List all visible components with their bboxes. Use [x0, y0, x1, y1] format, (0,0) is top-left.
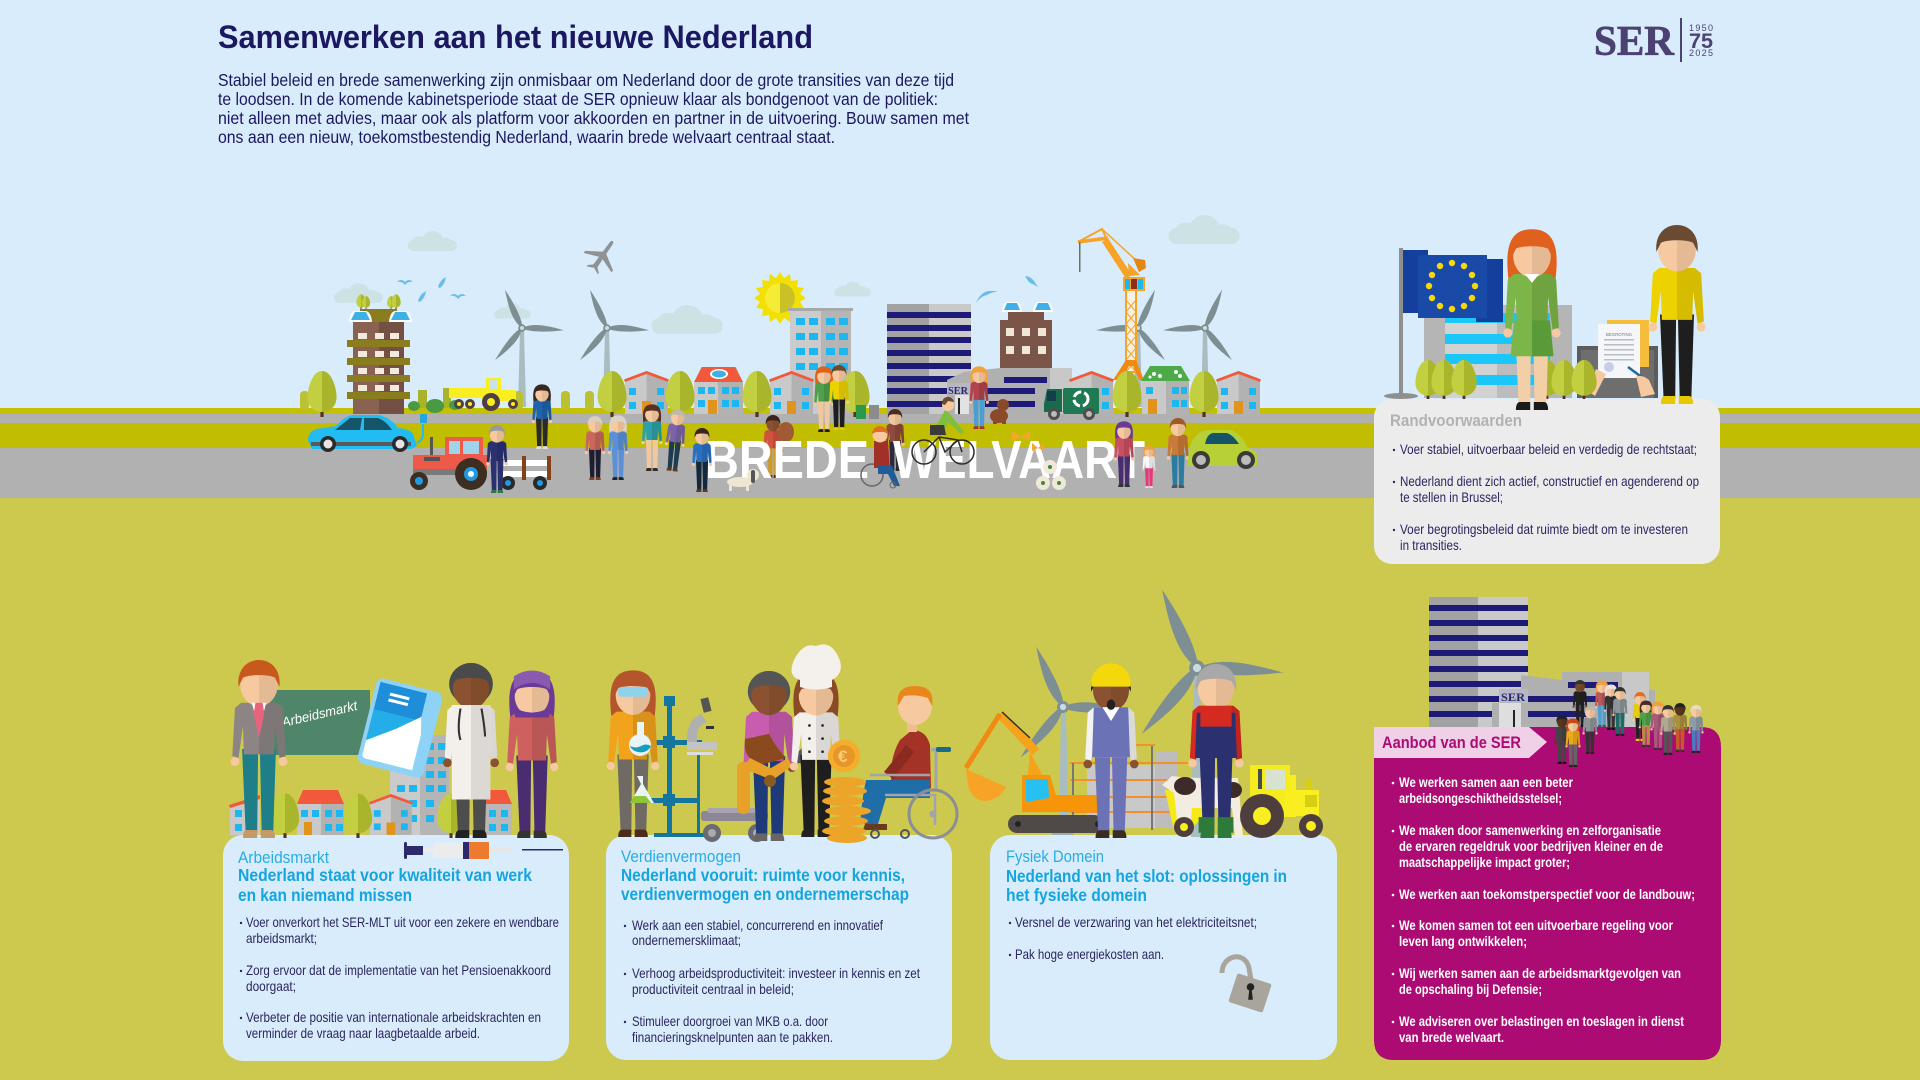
bullet list: We adviseren over belastingen en toeslagen in dienst	[1399, 1013, 1684, 1029]
chalkboard: Arbeidsmarkt	[279, 698, 360, 730]
hedges	[300, 391, 594, 410]
bullet list: We werken aan toekomstperspectief voor de landbouw;	[1399, 886, 1695, 902]
illustration: Randvoorwaarden scene	[1384, 248, 1658, 400]
bullet list: We werken samen aan een beter	[1399, 774, 1573, 790]
heading tag: Aanbod van de SER	[1382, 733, 1521, 752]
icon: crane	[1078, 229, 1146, 380]
chalkboard	[270, 690, 370, 755]
icon: airplane	[578, 231, 627, 280]
turbine: large	[1137, 587, 1283, 837]
bullet list: Pak hoge energiekosten aan.	[1015, 946, 1164, 962]
bullet list: van brede welvaart.	[1399, 1029, 1504, 1045]
laptop	[1577, 346, 1658, 398]
person: man in blazer	[231, 660, 287, 838]
budget document	[1588, 320, 1655, 397]
heading: Nederland van het slot: oplossingen in	[1006, 866, 1287, 886]
flag pole	[1384, 248, 1418, 399]
turbine: small	[1017, 645, 1129, 835]
person: man in yellow shirt	[1648, 225, 1706, 404]
budget document: BEGROTING	[1606, 332, 1632, 337]
birds	[397, 276, 1038, 303]
trees	[308, 371, 1218, 417]
icon: excavator	[966, 712, 1103, 833]
bullet list: Voer onverkort het SER-MLT uit voor een zekere en wendbare	[246, 914, 559, 930]
intro text: Stabiel beleid en brede samenwerking zijn onmisbaar om Nederland door de grote transities van deze tijd	[218, 70, 954, 90]
houses	[624, 366, 1261, 414]
title: Samenwerken aan het nieuwe Nederland	[218, 19, 813, 55]
person: scientist	[607, 670, 659, 837]
person: man in yellow	[829, 365, 849, 430]
bullet list: Versnel de verzwaring van het elektriciteitsnet;	[1015, 914, 1257, 930]
building: SER entrance: SER	[948, 385, 969, 397]
heading: en kan niemand missen	[238, 885, 412, 905]
building: green apartment	[347, 294, 412, 414]
logo: SER 75: 75	[1689, 30, 1713, 53]
person: doctor	[443, 663, 499, 838]
bullet list: de ervaren regeldruk voor bedrijven kleiner en de	[1399, 838, 1663, 854]
intro text	[218, 70, 969, 147]
grey flats	[390, 735, 449, 835]
person: construction worker	[1083, 663, 1139, 838]
bullet list	[240, 914, 559, 1041]
bullet list	[1392, 774, 1695, 1045]
heading: verdienvermogen en ondernemerschap	[621, 884, 909, 904]
chef hat	[791, 644, 841, 690]
bullet list: Stimuleer doorgroei van MKB o.a. door	[632, 1013, 828, 1029]
panel: Aanbod van de SER	[1374, 727, 1721, 1060]
icon: flasks	[629, 722, 654, 803]
panel: Fysiek Domein	[990, 835, 1337, 1060]
bullet list: Verhoog arbeidsproductiviteit: investeer in kennis en zet	[632, 965, 920, 981]
illustration: labour market	[229, 660, 563, 859]
bullet list: in transities.	[1400, 537, 1462, 553]
wind turbines: horizon	[493, 289, 1234, 407]
bullet list: ondernemersklimaat;	[632, 932, 741, 948]
bullet list: Werk aan een stabiel, concurrerend en innovatief	[632, 917, 883, 933]
bullet list: leven lang ontwikkelen;	[1399, 933, 1527, 949]
trees	[1415, 360, 1597, 400]
person: woman in green	[814, 366, 834, 432]
panel background	[1374, 727, 1721, 1060]
houses	[229, 790, 512, 835]
bullet list	[1393, 441, 1699, 553]
person: girl	[1142, 446, 1156, 488]
person: old man	[585, 416, 605, 480]
crowd of people	[1554, 680, 1704, 767]
microscope	[687, 697, 717, 755]
panel background	[1374, 399, 1720, 564]
panel background	[990, 835, 1337, 1060]
person: farmer	[486, 425, 508, 493]
bullet list: We maken door samenwerking en zelforganisatie	[1399, 822, 1661, 838]
garbage truck	[1044, 388, 1099, 420]
bullet list: Wij werken samen aan de arbeidsmarktgevolgen van	[1399, 965, 1681, 981]
trees	[271, 793, 465, 838]
icon: leaflet	[356, 677, 444, 779]
icon: syringe	[404, 842, 563, 859]
person: father	[1167, 418, 1189, 488]
heading	[621, 865, 909, 904]
illustration: SER office	[1429, 597, 1655, 727]
building: SER tower	[887, 304, 971, 414]
robot arm links	[737, 744, 814, 814]
building: SER entrance	[1492, 672, 1655, 727]
logo: SER 75: SER	[1594, 19, 1675, 65]
bullet list: We komen samen tot een uitvoerbare regeling voor	[1399, 917, 1673, 933]
bushes and crates	[408, 388, 461, 413]
background: landscape bands	[0, 408, 1920, 1080]
person: cyclist	[912, 397, 974, 464]
person: wheelchair user	[860, 686, 957, 838]
person: boy with dog	[692, 428, 712, 492]
building: SER entrance: SER	[1501, 690, 1525, 704]
icon: sun	[754, 272, 806, 324]
person: farmer	[1188, 664, 1244, 838]
lab stand	[650, 696, 704, 837]
yellow tractor with trailer	[449, 378, 518, 411]
logo: SER 75	[1594, 18, 1713, 65]
person: old man with cane	[662, 408, 688, 472]
panel: Verdienvermogen	[606, 835, 952, 1060]
icon: open padlock	[1222, 957, 1272, 1013]
panel background	[223, 835, 569, 1061]
logo: SER 75: 1950	[1689, 23, 1713, 33]
slogan: BREDE WELVAART: BREDE	[705, 430, 869, 490]
icon: brown dog	[990, 399, 1009, 424]
building under construction	[1070, 745, 1195, 830]
icon: euro coin: €	[838, 747, 848, 766]
illustration: physical domain	[966, 587, 1323, 838]
bullet list: Voer stabiel, uitvoerbaar beleid en verdedig de rechtstaat;	[1400, 441, 1697, 457]
heading: Randvoorwaarden	[1390, 411, 1522, 430]
bullet list	[1009, 914, 1257, 962]
building: SER tower	[1429, 597, 1528, 727]
label: Verdienvermogen	[621, 847, 741, 866]
bullet list: Zorg ervoor dat de implementatie van het Pensioenakkoord	[246, 962, 551, 978]
person: woman with hijab	[506, 671, 558, 838]
bullet list: verminder de vraag naar laagbetaalde arbeid.	[246, 1025, 480, 1041]
icon: euro coin	[828, 740, 860, 772]
recycling bins	[856, 405, 879, 419]
heading: het fysieke domein	[1006, 885, 1147, 905]
icon: dog	[727, 469, 759, 491]
intro text: ons aan een nieuw, toekomstbestendig Nederland, waarin brede welvaart centraal staat.	[218, 127, 835, 147]
people on the street	[486, 365, 1257, 493]
bullet list: de opschaling bij Defensie;	[1399, 981, 1542, 997]
person: hijab woman	[1114, 421, 1134, 487]
butterflies and flowers	[1012, 430, 1066, 490]
bullet list: financieringsknelpunten aan te pakken.	[632, 1029, 833, 1045]
robot cart	[701, 808, 768, 842]
person: woman with bag	[532, 384, 552, 449]
icon: cow and yellow tractor	[1162, 765, 1323, 838]
illustration: earning capacity	[607, 644, 957, 843]
intro text: niet alleen met advies, maar ook als platform voor akkoorden en partner in de uitvoering. Bouw samen met	[218, 108, 969, 128]
person: chef	[790, 671, 842, 837]
person: woman walking	[641, 404, 663, 471]
building: brown block	[1000, 302, 1053, 370]
bullet list: arbeidsmarkt;	[246, 930, 317, 946]
heading	[238, 865, 532, 905]
clouds	[334, 215, 1240, 334]
panel: Randvoorwaarden	[1374, 399, 1720, 564]
heading	[1006, 866, 1287, 905]
heading: Nederland staat voor kwaliteit van werk	[238, 865, 532, 885]
heading: Nederland vooruit: ruimte voor kennis,	[621, 865, 905, 885]
person: wheelchair user	[861, 426, 900, 488]
coin stack	[822, 777, 871, 843]
blue electric car	[308, 414, 427, 452]
label: Arbeidsmarkt	[238, 848, 329, 867]
bullet list: productiviteit centraal in beleid;	[632, 981, 794, 997]
bullet list: Nederland dient zich actief, constructief en agenderend op	[1400, 473, 1699, 489]
bullet list: maatschappelijke impact groter;	[1399, 854, 1570, 870]
panel: Arbeidsmarkt	[223, 835, 569, 1061]
bullet list: te stellen in Brussel;	[1400, 489, 1503, 505]
bullet list: Verbeter de positie van internationale arbeidskrachten en	[246, 1009, 541, 1025]
slogan: BREDE WELVAART	[705, 430, 1145, 490]
people behind the slogan	[763, 366, 989, 478]
person: woman in green dress	[1503, 229, 1561, 410]
building: SER entrance	[947, 368, 1072, 414]
green smart car	[1188, 430, 1257, 469]
panel background	[606, 835, 952, 1060]
bullet list: Voer begrotingsbeleid dat ruimte biedt om te investeren	[1400, 521, 1688, 537]
label: Fysiek Domein	[1006, 847, 1104, 866]
heading tag	[1374, 727, 1547, 758]
icon: EU flag	[1403, 250, 1503, 322]
person: woman with bag	[742, 671, 796, 841]
buildings: grey flats	[788, 308, 853, 414]
logo: SER 75: 2025	[1689, 48, 1713, 58]
bullet list: arbeidsongeschiktheidsstelsel;	[1399, 790, 1562, 806]
bullet list: doorgaat;	[246, 978, 296, 994]
slogan: BREDE WELVAART: WELVAART	[893, 430, 1145, 490]
bullet list	[624, 917, 920, 1045]
person: old woman	[608, 415, 628, 480]
building: European Commission	[1424, 305, 1572, 398]
red tractor	[410, 437, 551, 490]
intro text: te loodsen. In de komende kabinetsperiode staat de SER opnieuw klaar als bondgenoot van de politiek:	[218, 89, 938, 109]
